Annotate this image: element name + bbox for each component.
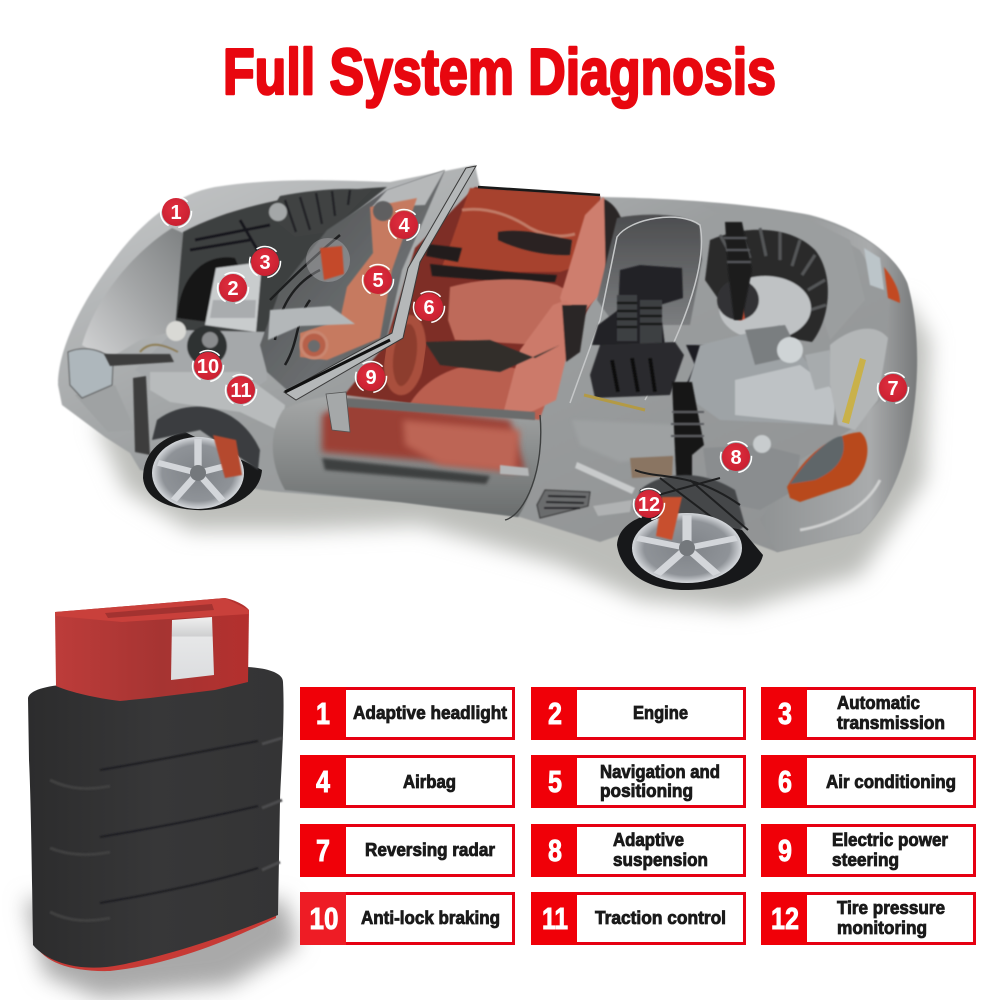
item 6: 6	[778, 764, 792, 799]
glass cables	[270, 235, 340, 365]
title: Full System Diagnosis	[223, 35, 776, 108]
item 5: positioning	[600, 780, 693, 801]
connector opening	[105, 604, 214, 618]
item 10: Anti-lock braking	[361, 907, 500, 928]
side vent	[537, 490, 590, 518]
rear tread over wheel	[634, 475, 745, 545]
door panel	[440, 188, 600, 272]
callout 12: 12	[638, 494, 660, 516]
airbag seat seen through glass	[300, 198, 417, 360]
callout 6	[414, 292, 444, 322]
front brake caliper	[213, 435, 242, 478]
callout 7: 7	[887, 378, 899, 400]
door curve line	[505, 415, 541, 520]
hood panel	[82, 228, 183, 355]
interior leather base	[320, 187, 605, 470]
car ground shadow	[95, 300, 930, 610]
item 7: Reversing radar	[365, 839, 495, 860]
fender lip	[593, 500, 632, 516]
item 1: Adaptive headlight	[353, 702, 507, 723]
item 2: 2	[548, 696, 562, 731]
shock absorber upper	[723, 222, 752, 320]
item 4	[300, 755, 514, 808]
dongle red base lip	[35, 905, 276, 971]
dash ring	[301, 332, 327, 358]
front wheel	[143, 407, 262, 510]
callout 10: 10	[197, 356, 219, 378]
item 1	[300, 687, 514, 740]
engine intake	[590, 265, 718, 398]
windshield glass	[260, 170, 445, 390]
item 5: Navigation and	[600, 761, 720, 782]
dongle black body	[28, 667, 284, 968]
transmission	[685, 325, 837, 425]
dongle shadow	[25, 900, 298, 998]
item 3: Automatic	[837, 692, 920, 713]
deck panel	[702, 205, 865, 340]
door top trim	[478, 187, 600, 195]
item 3	[761, 687, 974, 740]
item 9: steering	[832, 849, 899, 870]
mid engine blur	[572, 420, 680, 462]
item 3: 3	[778, 696, 792, 731]
pipe through glass	[268, 306, 355, 340]
door handle	[426, 209, 575, 282]
item 6	[761, 755, 974, 808]
upper tail light	[864, 248, 900, 303]
lower tail light	[787, 432, 867, 502]
callout 9: 9	[365, 367, 377, 389]
door handle exterior	[500, 465, 529, 476]
item 8: suspension	[613, 849, 708, 870]
metal latch	[171, 617, 214, 680]
callout 3	[250, 246, 280, 278]
illustration: cutaway sports car	[58, 165, 930, 610]
seat base through door	[403, 420, 520, 472]
door exterior	[273, 395, 540, 517]
item 4: 4	[316, 764, 331, 799]
engine bay	[135, 187, 387, 398]
tread lines	[635, 470, 748, 530]
callout 5: 5	[372, 270, 384, 292]
callout 1: 1	[170, 202, 182, 224]
rear brake caliper	[656, 497, 682, 540]
headlight	[68, 349, 113, 398]
rear arm	[575, 462, 635, 494]
seat upper	[448, 197, 626, 345]
item 5: 5	[548, 764, 562, 799]
callout 4: 4	[398, 215, 410, 237]
car body shell	[58, 165, 917, 552]
item 7	[300, 824, 514, 877]
item 10	[300, 892, 514, 945]
light engine parts	[269, 203, 287, 221]
item 6: Air conditioning	[826, 771, 956, 792]
orange module with halo	[306, 238, 350, 282]
callout 6: 6	[423, 297, 435, 319]
callout 8: 8	[730, 447, 742, 469]
rear bumper highlight	[800, 480, 880, 530]
muffler	[630, 456, 673, 478]
item 4: Airbag	[403, 771, 456, 792]
gold rod	[584, 395, 645, 410]
item 5	[531, 755, 744, 808]
front suspension	[104, 354, 174, 455]
callout 4	[388, 210, 420, 240]
front inner fender	[150, 372, 285, 432]
upper glass reflection	[372, 170, 445, 207]
windshield frame	[284, 166, 476, 400]
item 11: Traction control	[595, 907, 726, 928]
item 12: monitoring	[837, 917, 927, 938]
callout 11	[226, 374, 256, 406]
item 12	[761, 892, 974, 945]
item 8: 8	[548, 833, 562, 868]
item 9	[761, 824, 974, 877]
item 10: 10	[310, 901, 338, 936]
center console	[425, 340, 560, 372]
callout 11: 11	[230, 380, 252, 402]
upper rear wheel	[705, 228, 828, 342]
item 9: 9	[778, 833, 792, 868]
callout 8	[720, 442, 752, 472]
item 8: Adaptive	[613, 829, 684, 850]
item 3: transmission	[837, 712, 945, 733]
front upper tyre	[268, 189, 372, 237]
item 11: 11	[542, 901, 568, 936]
rear deck glass	[597, 215, 702, 325]
door mirror	[326, 392, 350, 432]
item 12: 12	[771, 901, 799, 936]
dongle red connector	[55, 598, 249, 701]
battery box	[205, 262, 262, 332]
callout 10	[192, 350, 224, 382]
rear panel	[760, 215, 917, 552]
dongle ridges	[50, 738, 282, 920]
front tread	[152, 407, 260, 470]
callout 2: 2	[227, 278, 239, 300]
rear wheel	[617, 497, 763, 590]
front lower tyre in bay	[177, 257, 240, 322]
item 9: Electric power	[832, 829, 948, 850]
legend table	[300, 687, 974, 945]
item 2: Engine	[633, 702, 688, 723]
steering wheel	[384, 317, 426, 393]
lower door dark strip	[322, 458, 490, 484]
footwell	[322, 400, 525, 470]
item 7: 7	[316, 833, 330, 868]
callout 3: 3	[259, 252, 271, 274]
callout 7	[878, 372, 908, 404]
shock absorber lower	[671, 382, 704, 510]
callout 1	[160, 196, 192, 228]
connector top rim	[55, 598, 249, 622]
callout 12	[634, 488, 664, 520]
rear deck glass arc	[570, 217, 701, 403]
nose lower panel	[75, 385, 135, 432]
rear mechanicals	[703, 445, 800, 510]
seat lower	[403, 300, 587, 472]
callout 2	[218, 272, 248, 304]
item 8	[531, 824, 744, 877]
door sill bar	[345, 398, 535, 420]
item 11	[531, 892, 744, 945]
item 2	[531, 687, 744, 740]
callout 9	[356, 362, 386, 392]
rear inner structure	[830, 329, 888, 430]
callout 5	[362, 264, 394, 296]
item 12: Tire pressure	[837, 897, 945, 918]
item 1: 1	[316, 696, 330, 731]
illustration: OBD dongle	[25, 598, 298, 998]
